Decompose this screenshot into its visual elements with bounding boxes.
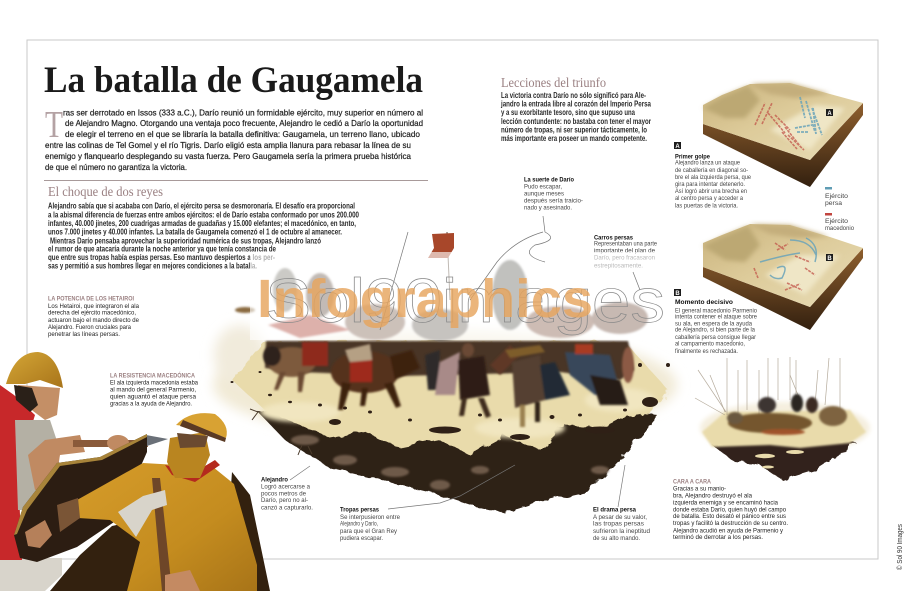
intro text block: entre las colinas de Tel Gomel y el río Tigris. Darío eligió esta amplia llanura para rebasar la línea de su — [45, 140, 411, 150]
watermark: Sol90images — [265, 267, 665, 336]
intro text block: de Alejandro Magno. Otorgando una ventaja poco frecuente, Alejandro le cedió a Darío la oportunidad — [65, 118, 423, 128]
drop cap: T — [45, 104, 63, 146]
shield — [14, 434, 147, 562]
caption: Alejandro: canzó a capturarlo. — [261, 504, 313, 511]
wash overlay over scene — [250, 252, 665, 340]
banner — [428, 232, 454, 300]
body text: El choque de dos reyes — [48, 200, 359, 270]
soil mottling — [291, 435, 609, 490]
intro text block — [45, 104, 423, 172]
intro text block: de elegir el terreno en el que se libraría la batalla definitiva: Gaugamela, un terreno llano, ubicado — [65, 129, 420, 139]
caption: El drama persa: las tropas persas — [593, 520, 645, 527]
caption: Tropas persas: pudiera escapar. — [340, 535, 383, 542]
caption: La potencia de los hetairoi: LA POTENCIA DE LOS HETAIROI — [48, 295, 134, 302]
body text: El choque de dos reyes: que entre sus tropas había espías persas. Eso mantuvo despiertos a los per- — [48, 252, 275, 262]
caption B: Momento decisivo: su ala, en espera de la ayuda — [675, 320, 752, 328]
Macedonian units — [754, 243, 815, 290]
sleeve cuff — [57, 498, 80, 532]
dark clods — [230, 363, 670, 440]
copyright: © Sol 90 Images — [896, 524, 904, 570]
small battle scene: Cara a cara — [695, 357, 870, 480]
caption A: Primer golpe: de caballería en diagonal so- — [675, 167, 748, 174]
caption: La suerte de Darío: después sería traicio- — [524, 197, 583, 204]
face wrap — [167, 432, 210, 478]
body text: Lecciones del triunfo: La victoria contra Darío no sólo significó para Ale- — [501, 90, 646, 100]
body text: Lecciones del triunfo: más importante era poseer un mando competente. — [501, 133, 647, 143]
body text: Lecciones del triunfo: jandro la entrada libre al corazón del Imperio Persa — [500, 98, 651, 108]
caption: El drama persa: A pesar de su valor, — [593, 514, 647, 521]
axe — [118, 490, 167, 537]
caption: El drama persa: de su alto mando. — [593, 535, 640, 542]
caption: Cara a cara: bra, Alejandro destruyó el ala — [673, 492, 752, 499]
scarf red trim — [165, 460, 220, 482]
label B on map: B — [827, 256, 832, 262]
helmet — [6, 352, 63, 388]
caption: Tropas persas: Se interpusieron entre — [340, 514, 400, 521]
caption: La resistencia macedónica: al mando del general Parmenio, — [110, 386, 196, 393]
body text: El choque de dos reyes: Alejandro sabía que si acababa con Darío, el ejército persa se desmoronaría. El desafío era proporcional — [48, 200, 355, 210]
intro text block: enemigo y flanquearlo desplegando su vasta fuerza. Pero Gaugamela sería la primera prueba histórica — [45, 151, 411, 161]
caption A: Primer golpe — [674, 142, 751, 210]
tunic — [15, 420, 60, 510]
caption A: Primer golpe: Primer golpe — [675, 153, 710, 160]
caption: Alejandro: pocos metros de — [261, 490, 306, 497]
body text: Lecciones del triunfo: número de tropas, ni ser superior tácticamente, lo — [501, 124, 647, 134]
legend: macedonio — [825, 225, 854, 232]
roots — [250, 409, 312, 455]
label B on map — [826, 254, 833, 262]
caption: La potencia de los hetairoi: Los Hetairoi, que integraron el ala — [48, 303, 139, 310]
spear shaft — [73, 440, 148, 447]
raised hand — [107, 435, 129, 451]
eye area — [177, 433, 208, 448]
legend: Ejército — [825, 218, 848, 225]
heading: El choque de dos reyes: El choque de dos reyes — [48, 185, 163, 200]
right soldiers and horses — [505, 344, 634, 427]
robe — [77, 463, 257, 591]
caption: Alejandro — [261, 476, 313, 511]
strap — [152, 478, 172, 591]
caption B: Momento decisivo: B — [675, 291, 680, 297]
intro text block: de que el número no garantiza la victoria. — [45, 162, 187, 172]
soldiers — [727, 394, 847, 435]
body text: El choque de dos reyes: a la abismal diferencia de fuerzas entre ambos ejércitos: el de Darío estaba conformado por unos 200.000 — [48, 210, 359, 220]
red cape — [0, 385, 35, 560]
caption: Alejandro: Darío, pero no al- — [261, 497, 308, 504]
caption: La resistencia macedónica — [110, 371, 198, 407]
Persian units — [795, 97, 822, 135]
legend — [825, 187, 854, 232]
caption: Tropas persas: Tropas persas — [340, 506, 379, 513]
caption A: Primer golpe: bre el ala izquierda persa, que — [675, 174, 751, 181]
caption B: Momento decisivo: finalmente es rechazada. — [675, 348, 738, 355]
caption B: Momento decisivo — [674, 289, 757, 355]
caption: El drama persa: sufrieron la ineptitud — [593, 528, 650, 535]
central soldiers — [425, 343, 520, 418]
caption: Carros persas: Representaban una parte — [594, 240, 657, 248]
white skirt — [0, 558, 62, 591]
dark hair — [14, 385, 38, 412]
caption A: Primer golpe: al centro persa y acceder a — [675, 195, 743, 202]
caption: Tropas persas — [340, 506, 400, 542]
shield hand — [25, 520, 52, 548]
caption: La resistencia macedónica: gracias a la ayuda de Alejandro. — [110, 400, 192, 407]
caption: El drama persa — [593, 506, 650, 542]
caption: La potencia de los hetairoi: derecha del ejército macedónico, — [48, 310, 136, 317]
soil patches — [755, 450, 804, 468]
caption: El drama persa: El drama persa — [593, 506, 636, 513]
caption: Cara a cara: donde estaba Darío, quien huyó del campo — [673, 506, 786, 513]
dust halo — [213, 330, 677, 440]
caption: Cara a cara: Gracias a su manio- — [673, 486, 726, 493]
caption B: Momento decisivo: El general macedonio Parmenio — [675, 307, 757, 314]
caption: Tropas persas: Alejandro y Darío, — [340, 521, 378, 528]
caption: La resistencia macedónica: LA RESISTENCIA MACEDÓNICA — [110, 371, 195, 379]
caption: La resistencia macedónica: quien aguantó el ataque persa — [110, 394, 196, 401]
caption: Carros persas: Darío, pero fracasaron — [594, 254, 655, 261]
body text: Lecciones del triunfo: y a su exorbitante tesoro, sino que supuso una — [501, 107, 635, 117]
caption: Alejandro: Logró acercarse a — [261, 483, 310, 490]
title: La batalla de Gaugamela — [44, 60, 423, 101]
caption A: Primer golpe: Así logró abrir una brecha en — [675, 188, 747, 195]
caption: Carros persas: importante del plan de — [594, 247, 655, 254]
caption B: Momento decisivo: Momento decisivo — [675, 299, 733, 306]
illustration: Persian soldier — [50, 413, 270, 591]
caption: La potencia de los hetairoi: actuaron bajo el mando directo de — [48, 317, 139, 324]
body text: Lecciones del triunfo: lección contundente: no bastaba con tener el mayor — [501, 116, 652, 126]
body text: Lecciones del triunfo — [500, 90, 652, 143]
caption B: Momento decisivo: intenta contener el ataque sobre — [675, 314, 757, 320]
caption A: Primer golpe: A — [675, 144, 680, 150]
illustration: Macedonian soldier — [0, 352, 168, 591]
caption: Cara a cara: izquierda enemiga y se encaminó hacia — [673, 499, 778, 506]
spears — [695, 357, 840, 415]
heading: Lecciones del triunfo: Lecciones del triunfo — [501, 76, 606, 91]
hand — [165, 570, 200, 591]
body text: El choque de dos reyes: el rumor de que atacaría durante la noche anterior ya que tenía constancia de — [48, 244, 276, 254]
caption: La suerte de Darío: Pudo escapar, — [524, 183, 562, 190]
body text: El choque de dos reyes: infantes, 40.000 jinetes, 200 cuadrigas armadas de guadañas y 15.000 elefantes; el macedónico, en tanto, — [48, 218, 356, 228]
brown horse — [331, 344, 420, 410]
horse and soldiers frieze — [265, 341, 634, 380]
dark cape — [50, 472, 270, 591]
caption: Cara a cara: Alejandro acudió en ayuda de Parmenio y — [673, 527, 784, 534]
caption: Carros persas: Carros persas — [594, 234, 633, 241]
label A on map: A — [827, 111, 832, 117]
left horse — [263, 342, 328, 392]
label A on map — [826, 109, 833, 117]
watermark: Infographics — [257, 269, 593, 329]
headband and cap — [176, 413, 227, 438]
soil underside — [258, 400, 658, 513]
sand surface — [232, 342, 668, 455]
caption A: Primer golpe: Alejandro lanza un ataque — [675, 160, 740, 166]
main battle scene — [213, 232, 677, 513]
neck and face — [18, 385, 60, 420]
legend: Ejército — [825, 193, 848, 200]
Macedonian units — [755, 103, 804, 150]
caption: Carros persas: estrepitosamente. — [594, 262, 643, 269]
caption: La resistencia macedónica: El ala izquierda macedonia estaba — [110, 379, 198, 386]
caption: La suerte de Darío: aunque meses — [524, 190, 565, 197]
caption: La potencia de los hetairoi — [48, 295, 139, 338]
spear tip — [146, 435, 168, 446]
legend: persa — [825, 200, 842, 207]
terrain map B — [703, 224, 863, 330]
caption: Cara a cara: terminó de derrotar a los persas. — [673, 534, 763, 541]
caption: Cara a cara — [673, 478, 788, 541]
upper riders — [235, 260, 648, 341]
terrain map A — [703, 83, 863, 187]
caption: La potencia de los hetairoi: Alejandro. Fueron cruciales para — [48, 324, 131, 331]
caption: La suerte de Darío — [524, 176, 583, 211]
arm — [28, 435, 85, 490]
caption A: Primer golpe: las puertas de la victoria. — [675, 203, 738, 210]
body text: El choque de dos reyes: sas y permitió a sus hombres llegar en mejores condiciones a la batalla. — [48, 260, 257, 270]
caption: La suerte de Darío: La suerte de Darío — [524, 176, 574, 183]
caption: Alejandro: Alejandro — [261, 476, 288, 483]
body text: El choque de dos reyes: unos 7.000 jinetes y 40.000 infantes. La batalla de Gaugamela comenzó el 1 de octubre al amanecer. — [48, 226, 342, 236]
leader lines — [290, 216, 640, 509]
caption B: Momento decisivo: caballería persa consigue llegar — [675, 334, 757, 341]
caption: Cara a cara: tropas y facilitó la destrucción de su centro. — [673, 520, 788, 527]
intro text block: ras ser derrotado en Issos (333 a.C.), Darío reunió un formidable ejército, muy superior en número al — [63, 108, 423, 118]
caption B: Momento decisivo: al campamento macedonio, — [675, 341, 745, 348]
caption: Carros persas — [594, 234, 657, 269]
caption: Cara a cara: de batalla. Esto desató el pánico entre sus — [673, 513, 787, 520]
caption: La suerte de Darío: nado y asesinado. — [524, 204, 572, 211]
caption: La potencia de los hetairoi: penetrar las líneas persas. — [48, 331, 120, 338]
caption: Tropas persas: para que el Gran Rey — [340, 528, 398, 535]
caption A: Primer golpe: gira para intentar detenerlo. — [675, 181, 745, 188]
body text: El choque de dos reyes: Mientras Darío pensaba aprovechar la superioridad numérica de sus tropas, Alejandro lanzó — [50, 236, 321, 246]
caption: Cara a cara: CARA A CARA — [673, 478, 711, 485]
Persian units — [760, 238, 816, 279]
caption B: Momento decisivo: de Alejandro, si bien parte de la — [675, 327, 755, 334]
